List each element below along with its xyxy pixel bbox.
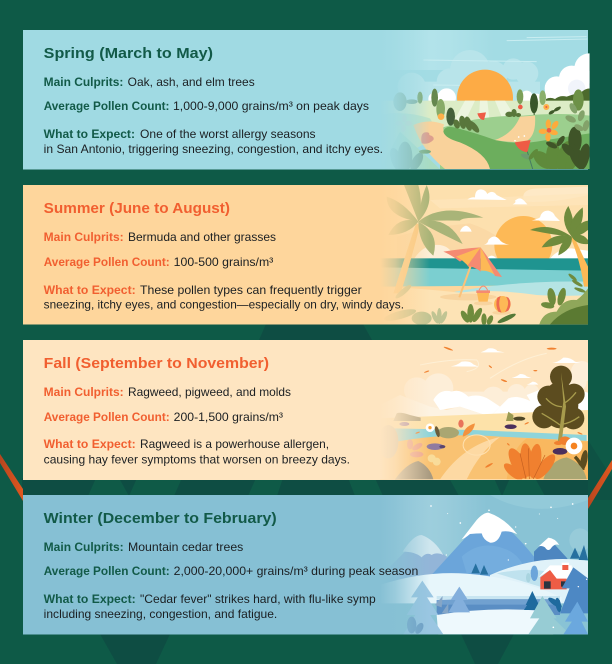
clouds <box>460 189 560 245</box>
text: winter culprits: Mountain cedar trees <box>128 540 243 554</box>
illustration: winter landscape <box>380 495 591 635</box>
back hill <box>490 559 588 603</box>
faded left plants <box>391 426 398 456</box>
beach ball <box>494 296 511 313</box>
bushes mid <box>446 106 562 134</box>
heading: summer: Summer (June to August) <box>44 201 230 217</box>
right palm <box>530 206 588 287</box>
heading: spring: Spring (March to May) <box>44 46 213 62</box>
text: spring what to expect <box>44 127 383 156</box>
front hill <box>380 573 562 603</box>
panel: fall <box>23 340 593 483</box>
text: spring pollen count: 1,000-9,000 grains/m³ on peak days <box>173 99 369 113</box>
panel: winter <box>23 495 591 635</box>
decorative orange line right <box>588 460 612 509</box>
text: winter pollen count: Average Pollen Count: <box>44 564 170 578</box>
text: fall what to expect: What to Expect: <box>44 437 136 451</box>
house <box>538 563 573 589</box>
tree <box>532 366 585 442</box>
text: summer culprits <box>44 230 276 244</box>
text: summer culprits: Bermuda and other grasses <box>128 230 276 244</box>
text: spring what to expect: What to Expect: <box>44 127 135 141</box>
text: winter what to expect: including sneezing, congestion, and fatigue. <box>44 607 277 621</box>
snowflakes <box>430 503 587 628</box>
panel: summer <box>23 185 588 326</box>
text: summer pollen count: Average Pollen Count: <box>44 255 170 269</box>
flowers <box>421 104 558 169</box>
text: winter pollen count: 2,000-20,000+ grains/m³ during peak season <box>174 564 418 578</box>
text: winter culprits: Main Culprits: <box>44 540 124 554</box>
text: summer pollen count: 100-500 grains/m³ <box>174 255 273 269</box>
falling leaves <box>415 346 583 468</box>
text: spring culprits: Oak, ash, and elm trees <box>128 75 255 89</box>
clouds <box>451 348 581 385</box>
plant by house <box>526 566 538 582</box>
small dark trees <box>471 545 588 575</box>
text: summer what to expect: These pollen types can frequently trigger <box>140 283 362 297</box>
text: winter what to expect <box>44 592 376 621</box>
umbrella <box>443 247 502 297</box>
text: fall culprits: Main Culprits: <box>44 385 124 399</box>
text: fall culprits: Ragweed, pigweed, and molds <box>128 385 291 399</box>
text: fall pollen count: 200-1,500 grains/m³ <box>174 410 283 424</box>
text: spring pollen count: Average Pollen Count: <box>44 99 170 113</box>
text: summer what to expect: What to Expect: <box>44 283 136 297</box>
text: spring what to expect: One of the worst allergy seasons <box>140 127 316 141</box>
text: summer pollen count <box>44 255 273 269</box>
heading: fall: Fall (September to November) <box>44 356 269 372</box>
text: fall pollen count: Average Pollen Count: <box>44 410 170 424</box>
text: fall culprits <box>44 385 291 399</box>
text: fall what to expect: causing hay fever symptoms that worsen on breezy days. <box>44 452 350 466</box>
small plants <box>391 412 588 480</box>
illustration: fall landscape <box>378 340 593 483</box>
panel: spring <box>23 30 604 174</box>
decorative orange line left <box>0 454 23 501</box>
text: fall what to expect: Ragweed is a powerhouse allergen, <box>140 437 329 451</box>
text: spring culprits <box>44 75 255 89</box>
text: summer culprits: Main Culprits: <box>44 230 124 244</box>
text: fall pollen count <box>44 410 283 424</box>
heading: winter: Winter (December to February) <box>44 511 277 527</box>
wind swirls <box>420 353 547 378</box>
foreground leaves <box>387 102 592 174</box>
text: spring pollen count <box>44 99 369 113</box>
text: summer what to expect: sneezing, itchy eyes, and congestion—especially on dry, windy days. <box>44 298 404 312</box>
text: fall what to expect <box>44 437 350 466</box>
trees <box>403 567 588 635</box>
beach plants <box>383 273 588 326</box>
bucket <box>476 286 490 302</box>
illustration: summer beach <box>380 185 588 326</box>
text: winter what to expect: "Cedar fever" strikes hard, with flu-like symp <box>140 592 376 606</box>
illustration: spring landscape <box>392 30 590 169</box>
text: spring culprits: Main Culprits: <box>44 75 123 89</box>
text: winter what to expect: What to Expect: <box>44 592 136 606</box>
trees <box>393 89 584 119</box>
text: summer what to expect <box>44 283 404 312</box>
text: winter culprits <box>44 540 243 554</box>
left palm <box>387 185 483 293</box>
text: winter pollen count <box>44 564 418 578</box>
text: spring what to expect: in San Antonio, triggering sneezing, congestion, and itchy eyes. <box>44 142 383 156</box>
